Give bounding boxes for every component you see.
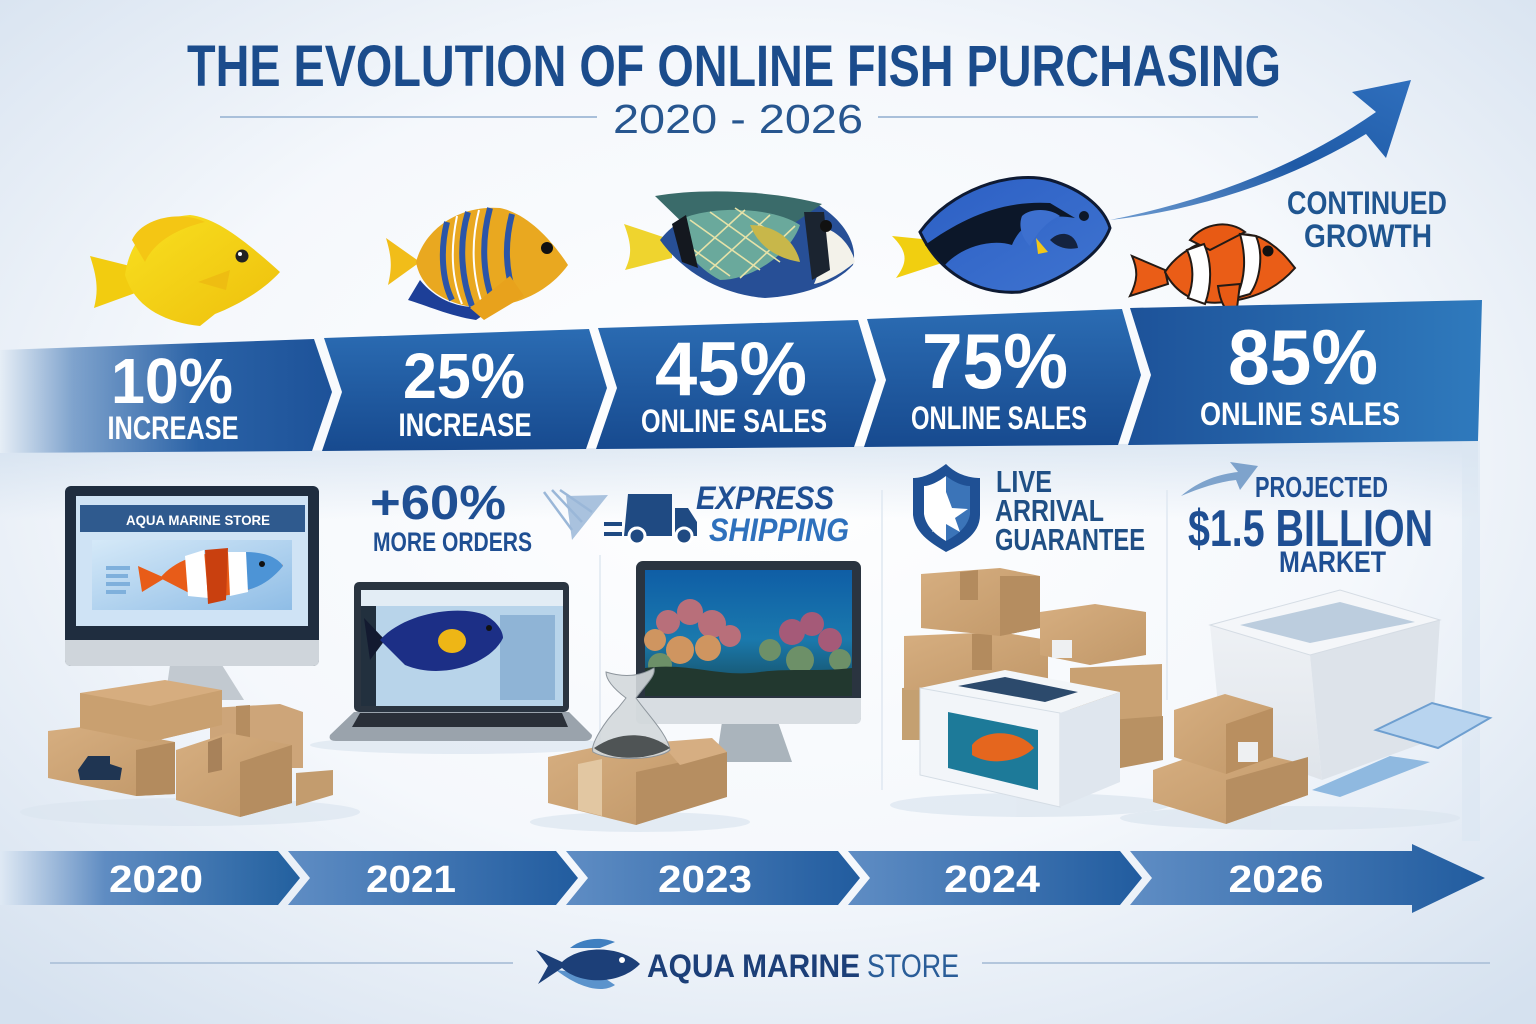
timeline segment 2026: 2026 [1228, 859, 1324, 901]
panel: ribbon segment 2021: INCREASE [398, 407, 532, 443]
live arrival guarantee label: LIVE [996, 464, 1052, 499]
icon: teal scaled fish [624, 191, 855, 298]
icon: monitor with coral reef [636, 561, 861, 762]
timeline segment 2021: 2021 [366, 859, 456, 901]
icon: desktop monitor with store page: AQUA MARINE STORE [126, 512, 270, 528]
growth arrow [1110, 80, 1411, 220]
timeline segment 2021 [288, 851, 578, 905]
projected market callout: PROJECTED [1255, 472, 1388, 504]
panel: ribbon segment 2020 [0, 339, 332, 453]
panel: ribbon segment 2026: 85% [1228, 313, 1378, 401]
express shipping label: SHIPPING [709, 512, 849, 548]
icon: striped angelfish [386, 208, 568, 320]
timeline segment 2023: 2023 [658, 859, 752, 901]
icon: yellow tang fish [90, 215, 280, 326]
express shipping label: EXPRESS [696, 480, 835, 516]
icon: foam shipping box with clownfish [920, 670, 1120, 807]
footer logo: STORE [867, 948, 959, 984]
continued growth label [1287, 185, 1447, 254]
title: THE EVOLUTION OF ONLINE FISH PURCHASING [187, 34, 1281, 99]
panel: ribbon segment 2024: 75% [922, 317, 1068, 405]
+60% more orders callout: MORE ORDERS [373, 527, 532, 557]
icon: clownfish on ribbon [1130, 224, 1295, 316]
panel: ribbon of percentages [0, 300, 1482, 453]
panel: ribbon segment 2026: ONLINE SALES [1200, 396, 1400, 432]
timeline segment 2024 [848, 851, 1142, 905]
projected market callout [1181, 462, 1433, 579]
projected market callout: MARKET [1279, 546, 1386, 579]
icon: cardboard boxes 2020 [48, 680, 333, 817]
timeline arrow [0, 844, 1485, 913]
live arrival guarantee label: GUARANTEE [995, 522, 1145, 557]
live arrival guarantee label: ARRIVAL [995, 493, 1104, 528]
icon: logo fish [536, 939, 640, 989]
panel: ribbon segment 2020: INCREASE [108, 410, 238, 446]
subtitle: date range: 2020 - 2026 [613, 96, 863, 142]
continued growth label: GROWTH [1304, 218, 1432, 254]
panel: ribbon segment 2023: ONLINE SALES [641, 403, 827, 439]
icon: delivery truck [604, 494, 697, 544]
icon: blue tang fish [892, 177, 1110, 292]
icon: stacked boxes 2024 [902, 568, 1163, 770]
icon: shield with star [913, 464, 980, 552]
icon: blue lid tray [1376, 703, 1490, 748]
timeline segment 2026 [1130, 844, 1485, 913]
+60% more orders callout [370, 477, 532, 557]
timeline segment 2024: 2024 [944, 859, 1040, 901]
timeline segment 2023 [566, 851, 860, 905]
icon: boxes 2026 [1153, 694, 1308, 824]
panel: ribbon segment 2026 [1128, 300, 1482, 445]
panel: ribbon segment 2020: 10% [111, 345, 233, 417]
projected market callout: $1.5 BILLION [1188, 500, 1433, 558]
panel: ribbon segment 2021: 25% [403, 340, 525, 412]
timeline segment 2020 [0, 851, 300, 905]
timeline segment 2020: 2020 [109, 859, 203, 901]
ribbon shadow fade [0, 441, 1478, 520]
panel: ribbon segment 2023: 45% [655, 327, 807, 412]
icon: laptop with blue fish [330, 582, 592, 741]
icon: small upward arrow [1181, 462, 1258, 496]
+60% more orders callout: +60% [370, 477, 506, 530]
live arrival guarantee label [995, 464, 1145, 557]
icon: paper plane [544, 490, 608, 540]
footer logo [50, 939, 1490, 989]
icon: tray base [1312, 756, 1430, 797]
panel: ribbon segment 2021 [322, 329, 607, 451]
icon: large foam cooler [1210, 590, 1440, 780]
icon: boxes with fish bag [548, 668, 727, 825]
icon: desktop monitor with store page [65, 486, 319, 700]
footer logo: AQUA MARINE [647, 948, 860, 984]
panel: ribbon segment 2024: ONLINE SALES [911, 400, 1087, 436]
express shipping label [696, 480, 849, 548]
panel: ribbon segment 2024 [864, 309, 1141, 447]
panel: ribbon segment 2023 [596, 320, 876, 449]
continued growth label: CONTINUED [1287, 185, 1447, 221]
